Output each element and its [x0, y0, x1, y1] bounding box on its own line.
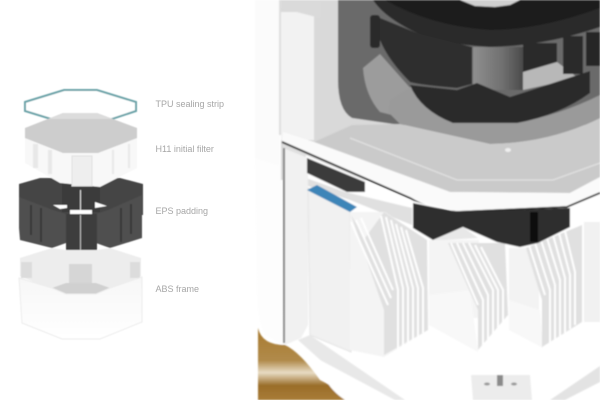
white base tray	[298, 335, 600, 400]
filter cartridge side frame	[283, 148, 351, 352]
dark gasket blocks right	[413, 203, 570, 247]
bottom platform	[314, 118, 600, 193]
pleated filter sections	[350, 212, 600, 357]
label: ABS frame: ABS frame	[156, 284, 199, 294]
cutaway photo of purifier	[255, 0, 600, 400]
part: TPU sealing strip	[25, 90, 136, 123]
blue tab	[307, 185, 357, 212]
foam surround	[281, 0, 600, 180]
filter chamber white background	[283, 145, 600, 400]
exploded filter diagram	[19, 90, 143, 339]
bottom mounting bracket	[471, 375, 532, 400]
part: H11 initial filter	[25, 113, 137, 187]
fan impeller	[370, 0, 600, 123]
part: ABS frame	[19, 248, 142, 339]
part: EPS padding back wall	[19, 178, 143, 215]
label: TPU sealing strip: TPU sealing strip	[156, 99, 224, 109]
part: EPS padding front	[19, 195, 142, 250]
gold base	[258, 328, 358, 400]
label: H11 initial filter: H11 initial filter	[156, 144, 214, 154]
label: EPS padding: EPS padding	[156, 206, 208, 216]
dark gasket block left	[307, 158, 365, 192]
white rim	[282, 132, 600, 212]
outer shell left strip	[255, 0, 283, 345]
fan housing	[338, 0, 600, 144]
